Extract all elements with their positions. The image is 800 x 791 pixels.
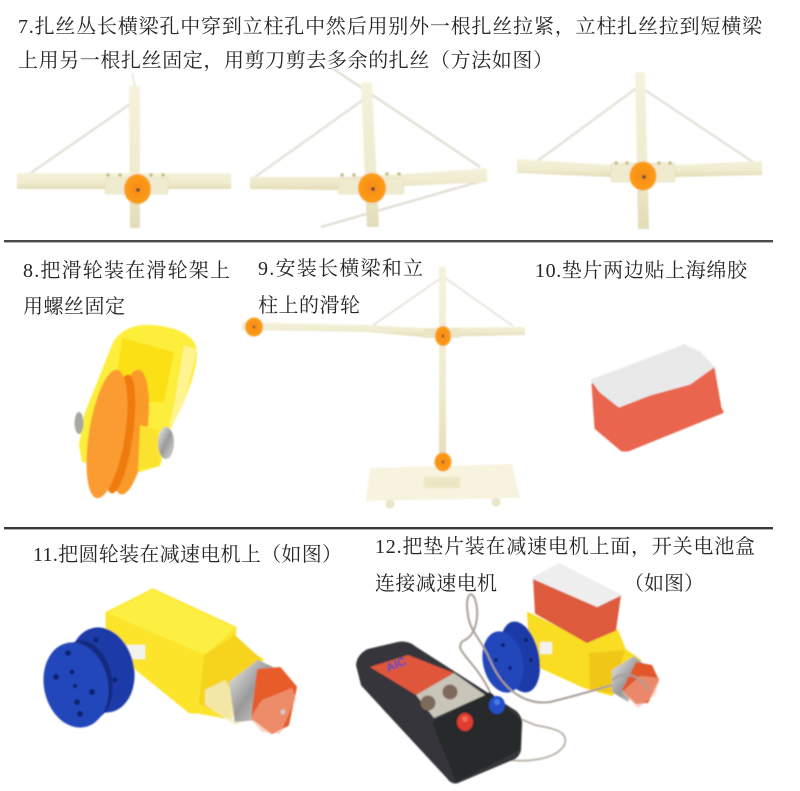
crossbar assembly: two wires [250,68,487,227]
heading: step 11: 11.把圆轮装在减速电机上（如图） [33,543,342,566]
battery box: AIC [384,654,409,675]
heading: step 9: 柱上的滑轮 [258,294,360,317]
photo: pulley in bracket [74,325,197,501]
battery box [357,643,521,782]
crossbar assembly: one wire [17,73,231,228]
heading: step 8 [23,259,230,318]
photo: wired motor with pad and battery box [357,564,660,782]
photo: motor with blue wheel [36,590,296,734]
photo: sponge pad [591,345,722,450]
crossbar assembly: finished [517,72,762,229]
heading: step 12: 12.把垫片装在减速电机上面，开关电池盒 [375,535,755,558]
heading: step 7: 7.扎丝丛长横梁孔中穿到立柱孔中然后用别外一根扎丝拉紧，立柱扎丝拉到短横梁 [18,15,763,38]
heading: step 8: 用螺丝固定 [23,295,125,318]
heading: step 8: 8.把滑轮装在滑轮架上 [23,259,230,282]
heading: step 9: 9.安装长横梁和立 [258,257,423,280]
heading: step 10: 10.垫片两边贴上海绵胶 [535,259,748,282]
heading: step 7: 上用另一根扎丝固定，用剪刀剪去多余的扎丝（方法如图） [18,49,553,72]
heading: step 12: （如图） [624,572,704,595]
photo: crane frame with pulleys [242,267,525,508]
heading: step 12 [375,535,755,595]
heading: step 12: 连接减速电机 [375,572,497,595]
panel: step 7 photos [17,68,762,229]
heading: step 7 [18,15,763,72]
heading: step 9 [258,257,423,317]
